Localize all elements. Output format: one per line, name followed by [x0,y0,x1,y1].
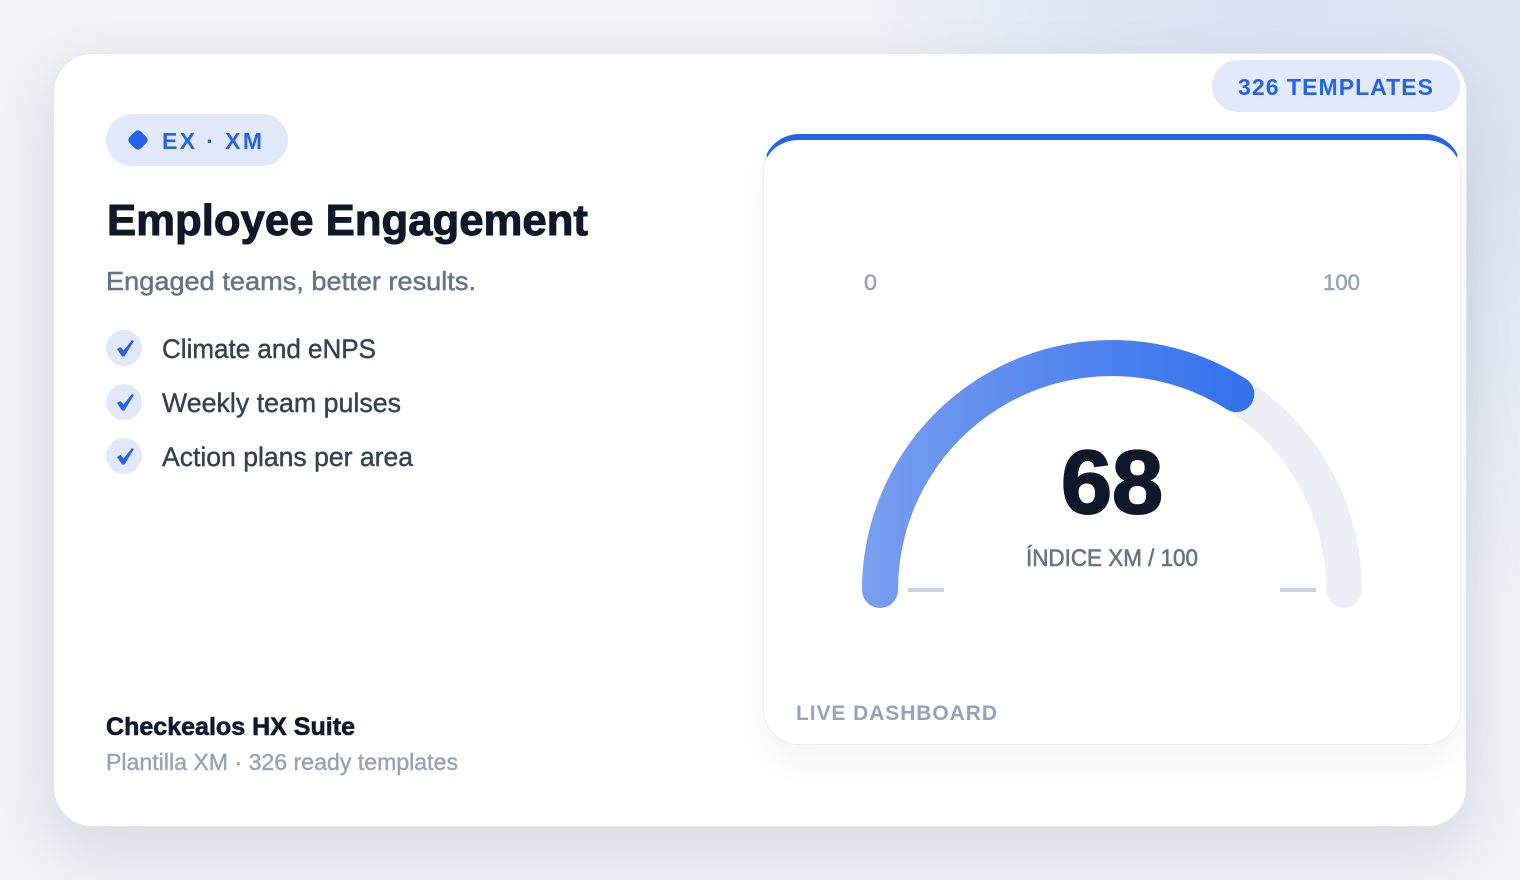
gauge value arc [880,358,1236,590]
item: action plans per area: Action plans per area [162,442,414,472]
item: weekly team pulses [106,384,401,420]
badge text: 326 templates: 326 TEMPLATES [1238,74,1433,100]
checklist [106,330,414,474]
subtitle: Engaged teams, better results. [106,266,476,296]
tick right [1280,588,1316,592]
scale label min: 0 [864,270,877,295]
badge: category tag background [106,114,288,166]
footer caption: Plantilla XM · 326 ready templates [106,749,458,775]
panel: live dashboard gauge card [763,134,1461,745]
gauge track [880,358,1344,590]
live dashboard label: LIVE DASHBOARD [796,702,997,725]
tick left [908,588,944,592]
scale label max: 100 [1323,270,1360,295]
tag text: EX XM: EX · XM [162,128,262,154]
item: weekly team pulses: Weekly team pulses [162,388,401,418]
icon: diamond [127,129,149,151]
title: Employee Engagement [107,196,588,245]
footer brand name: Checkealos HX Suite [106,713,355,741]
item: climate and eNPS [106,330,376,366]
item: action plans per area [106,438,414,474]
gauge value: 68 [1061,433,1163,533]
badge: template count background [1212,60,1460,112]
gauge chart [880,358,1344,592]
item: climate and eNPS: Climate and eNPS [162,334,376,364]
gauge label: ÍNDICE XM / 100 [1026,545,1198,572]
